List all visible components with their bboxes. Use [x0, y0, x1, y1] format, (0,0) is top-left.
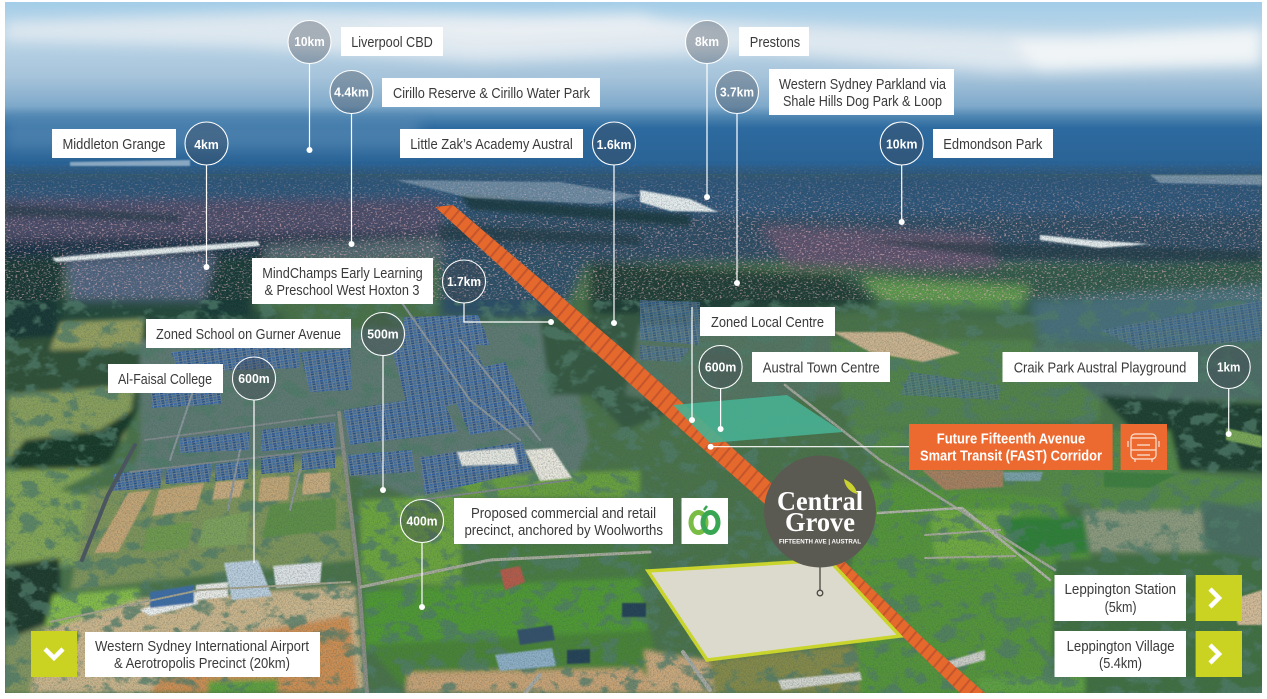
callout: Leppington Village: (5.4km): [1099, 655, 1142, 672]
logo badge: Central Grove: Central: [777, 486, 863, 516]
new subdivision lots: [94, 448, 572, 553]
callout: Cirillo Reserve: Cirillo Reserve & Cirillo Water Park: [393, 85, 590, 102]
callout: Zoned Local Centre: [689, 307, 835, 423]
callout: Edmondson Park: Edmondson Park: [943, 136, 1043, 153]
callout: MindChamps: & Preschool West Hoxton 3: [264, 282, 420, 299]
mid ground colour fields: [5, 310, 1267, 695]
callout: Middleton Grange: [52, 122, 228, 270]
paddock features: [495, 428, 1262, 690]
callout: Zoned School: 500m: [367, 328, 399, 342]
callout: Woolworths precinct: 400m: [406, 514, 438, 528]
callout: Western Sydney Parkland: 3.7km: [720, 86, 754, 100]
callout: Liverpool CBD: Liverpool CBD: [351, 34, 433, 51]
pink suburb speckle: [5, 160, 1262, 300]
logo badge: Central Grove: Grove: [785, 507, 855, 537]
callout: Little Zak's Academy: 1.6km: [597, 138, 631, 152]
callout: Craik Park: Craik Park Austral Playground: [1014, 360, 1186, 376]
callout: Zoned Local Centre: Zoned Local Centre: [711, 314, 824, 331]
tan development area: [833, 332, 960, 362]
icon: down chevron: [45, 649, 63, 658]
tree canopy texture: [5, 300, 1262, 693]
icon: right chevron: [1210, 589, 1219, 607]
callout: Woolworths precinct: precinct, anchored by Woolworths: [464, 522, 663, 539]
icon: leaf: [844, 479, 857, 494]
callout: Western Sydney Parkland: [716, 69, 954, 286]
icon: bus: [1128, 434, 1159, 462]
roads: [50, 300, 1055, 693]
callout: Edmondson Park: [880, 122, 1053, 225]
callout: Western Sydney International Airport: Western Sydney International Airport: [95, 638, 310, 655]
Central Grove site outline: [648, 560, 900, 660]
far suburbs base: [0, 170, 1267, 345]
callout: Western Sydney International Airport: [31, 631, 320, 677]
callout: Leppington Station: Leppington Station: [1064, 581, 1176, 598]
callout: Leppington Station: [1054, 575, 1242, 621]
callout: FAST corridor: Smart Transit (FAST) Corridor: [920, 448, 1102, 464]
logo badge: Central Grove: [764, 456, 876, 596]
callout: Middleton Grange: 4km: [194, 138, 219, 152]
callout: Woolworths precinct: [400, 498, 728, 610]
residential house blocks: [112, 300, 1262, 495]
warehouses: [52, 160, 1262, 262]
callout: Austral Town Centre: 600m: [705, 360, 736, 374]
clouds: [5, 12, 1262, 150]
icon: Woolworths logo: [691, 506, 718, 532]
callout: MindChamps: MindChamps Early Learning: [262, 265, 423, 282]
dark tree bands: [5, 195, 1260, 262]
callout: Cirillo Reserve: [330, 70, 600, 247]
school buildings: [140, 560, 322, 616]
callout: Al-Faisal College: Al-Faisal College: [118, 371, 212, 388]
callout: Liverpool CBD: [288, 20, 443, 153]
callout: Little Zak's Academy: Little Zak’s Academy Austral: [410, 136, 573, 153]
icon: right chevron: [1210, 645, 1219, 663]
callout: Austral Town Centre: Austral Town Centre: [763, 360, 880, 376]
callout: Woolworths precinct: Proposed commercial and retail: [471, 505, 656, 522]
callout: FAST corridor: [708, 424, 1167, 470]
fine photo grain: [5, 166, 1262, 693]
callout: Craik Park: [1002, 346, 1250, 437]
callout: Al-Faisal College: [108, 357, 276, 563]
callout: Austral Town Centre: [699, 346, 890, 432]
callout: Zoned School: Zoned School on Gurner Avenue: [156, 326, 341, 343]
callout: Prestons: Prestons: [750, 34, 800, 51]
teal Austral Town Centre site: [673, 395, 843, 443]
callout: Liverpool CBD: 10km: [294, 35, 325, 49]
callout: Middleton Grange: Middleton Grange: [62, 136, 166, 153]
callout: Western Sydney International Airport: & Aerotropolis Precinct (20km): [114, 655, 290, 672]
callout: Little Zak's Academy: [400, 122, 636, 326]
logo badge: Central Grove: FIFTEENTH AVE | AUSTRAL: [779, 538, 861, 546]
callout: Prestons: 8km: [695, 35, 719, 49]
callout: Al-Faisal College: 600m: [238, 372, 270, 386]
callout: Western Sydney Parkland: Shale Hills Dog Park & Loop: [783, 93, 942, 110]
orange FAST corridor: [435, 205, 985, 693]
callout: Craik Park: 1km: [1217, 360, 1240, 374]
callout: Cirillo Reserve: 4.4km: [334, 86, 369, 100]
callout: Western Sydney Parkland: Western Sydney Parkland via: [779, 76, 947, 93]
callout: Leppington Village: Leppington Village: [1067, 638, 1175, 655]
callout: MindChamps: [252, 258, 554, 325]
callout: Prestons: [686, 20, 809, 200]
callout: FAST corridor: Future Fifteenth Avenue: [937, 432, 1085, 448]
callout: Leppington Station: (5km): [1105, 599, 1137, 616]
callout: Leppington Village: [1054, 631, 1242, 677]
callout: Edmondson Park: 10km: [886, 138, 917, 152]
callout: Zoned School: [146, 312, 404, 493]
callout: MindChamps: 1.7km: [447, 275, 481, 289]
